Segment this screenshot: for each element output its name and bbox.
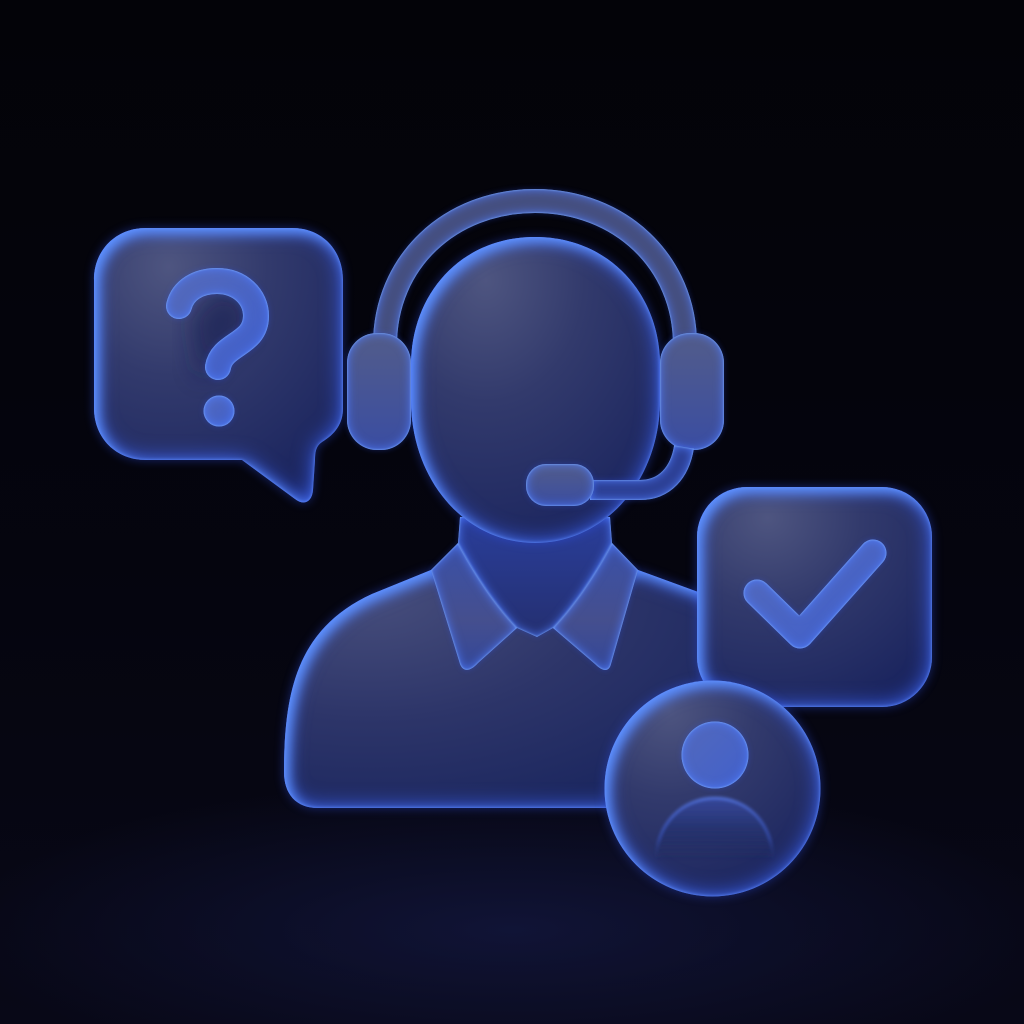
soft shadow behind question mark	[190, 290, 249, 380]
microphone boom	[590, 447, 684, 490]
question mark hook	[179, 281, 256, 367]
bubble shape	[94, 228, 343, 502]
user head	[682, 722, 748, 788]
panel: user badge	[604, 680, 820, 896]
agent head	[411, 237, 660, 543]
question mark	[179, 281, 256, 426]
panel: question speech bubble	[94, 228, 343, 502]
shirt centre seam	[534, 636, 536, 800]
agent neck	[458, 517, 612, 637]
agent body and shoulders	[284, 570, 720, 808]
microphone capsule	[526, 464, 594, 506]
right shirt collar	[553, 543, 638, 670]
check mark	[757, 553, 873, 635]
headset headband	[385, 201, 685, 345]
question mark dot	[204, 396, 234, 426]
left shirt collar	[431, 543, 517, 670]
right ear cup	[660, 333, 724, 450]
badge circle	[604, 680, 820, 896]
panel: check mark tile	[697, 487, 932, 707]
left ear cup	[347, 333, 411, 450]
panel: agent figure with headset	[284, 201, 724, 808]
user shoulders	[656, 798, 773, 860]
tile shape	[697, 487, 932, 707]
